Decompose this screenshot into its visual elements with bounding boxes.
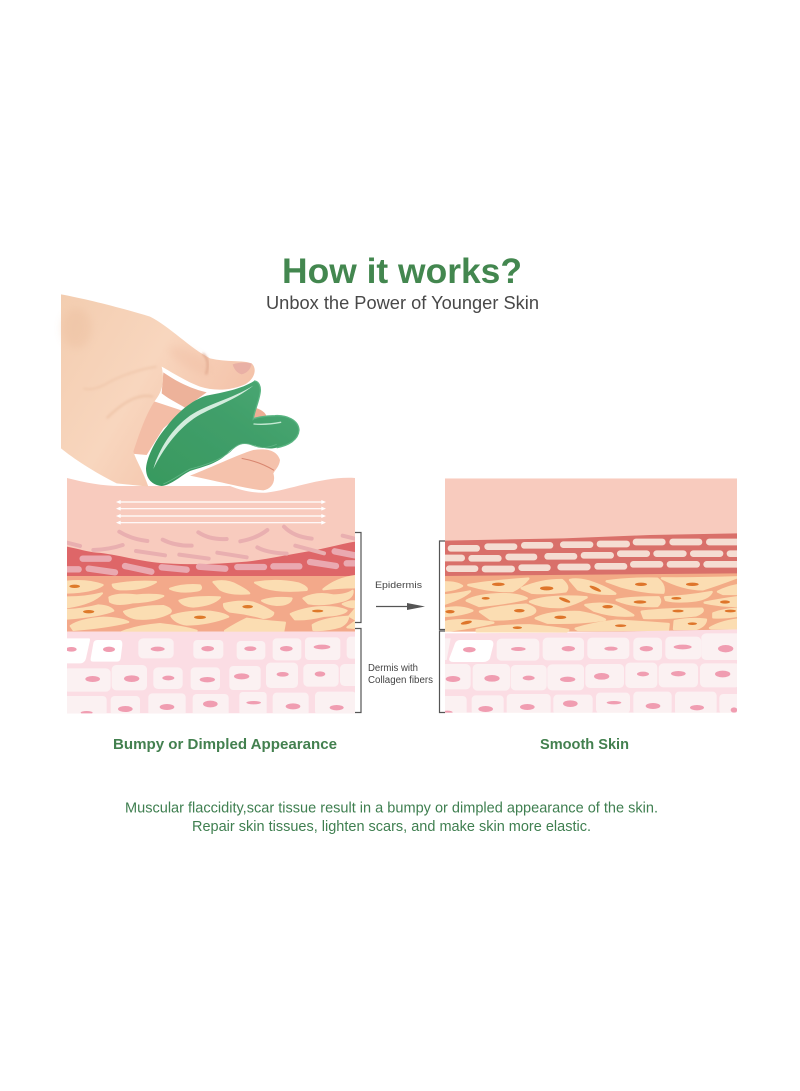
red layer cells bbox=[445, 542, 737, 569]
caption: smooth skin: Smooth Skin bbox=[540, 737, 629, 753]
red layer cells bbox=[67, 551, 355, 572]
orange cells bbox=[67, 576, 355, 632]
hand bbox=[61, 294, 280, 490]
dermis layer bbox=[67, 632, 355, 713]
description text: Repair skin tissues, lighten scars, and make skin more elastic. bbox=[192, 818, 591, 835]
description text: Muscular flaccidity,scar tissue result in a bumpy or dimpled appearance of the skin. bbox=[125, 800, 658, 816]
orange nuclei bbox=[69, 585, 323, 619]
panel: smooth skin diagram bbox=[440, 478, 743, 716]
orange cell layer bbox=[67, 576, 355, 632]
title: How it works? bbox=[282, 252, 522, 291]
red epidermis layer bbox=[67, 542, 355, 577]
red epidermis layer bbox=[445, 533, 737, 577]
jade stone bbox=[146, 381, 299, 486]
subtitle: Unbox the Power of Younger Skin bbox=[266, 293, 539, 313]
caption: bumpy appearance: Bumpy or Dimpled Appearance bbox=[113, 737, 337, 753]
white massage arrows bbox=[116, 500, 326, 525]
bracket: right dermis bbox=[440, 631, 445, 712]
orange cells bbox=[445, 577, 737, 631]
bracket: right epidermis bbox=[440, 541, 445, 630]
dermis cells bbox=[63, 637, 360, 717]
label: epidermis: Epidermis bbox=[375, 580, 422, 591]
orange cell layer bbox=[445, 573, 737, 632]
label: dermis with collagen fibers: Dermis with bbox=[368, 663, 418, 674]
dermis nuclei bbox=[442, 645, 737, 714]
bracket: left dermis bbox=[355, 628, 361, 712]
dermis layer bbox=[445, 629, 737, 713]
bracket: left epidermis bbox=[355, 532, 361, 622]
scattered surface cells bbox=[67, 527, 355, 559]
dermis nuclei bbox=[66, 645, 344, 714]
panel: bumpy skin diagram bbox=[63, 478, 360, 717]
skin surface layer bbox=[445, 478, 737, 541]
skin surface layer bbox=[67, 478, 355, 564]
dermis cells bbox=[440, 633, 743, 716]
arrow bbox=[376, 603, 425, 610]
icon: hand holding gua sha stone bbox=[61, 294, 299, 490]
label: dermis with collagen fibers: Collagen fibers bbox=[368, 675, 433, 686]
orange nuclei bbox=[445, 583, 736, 629]
